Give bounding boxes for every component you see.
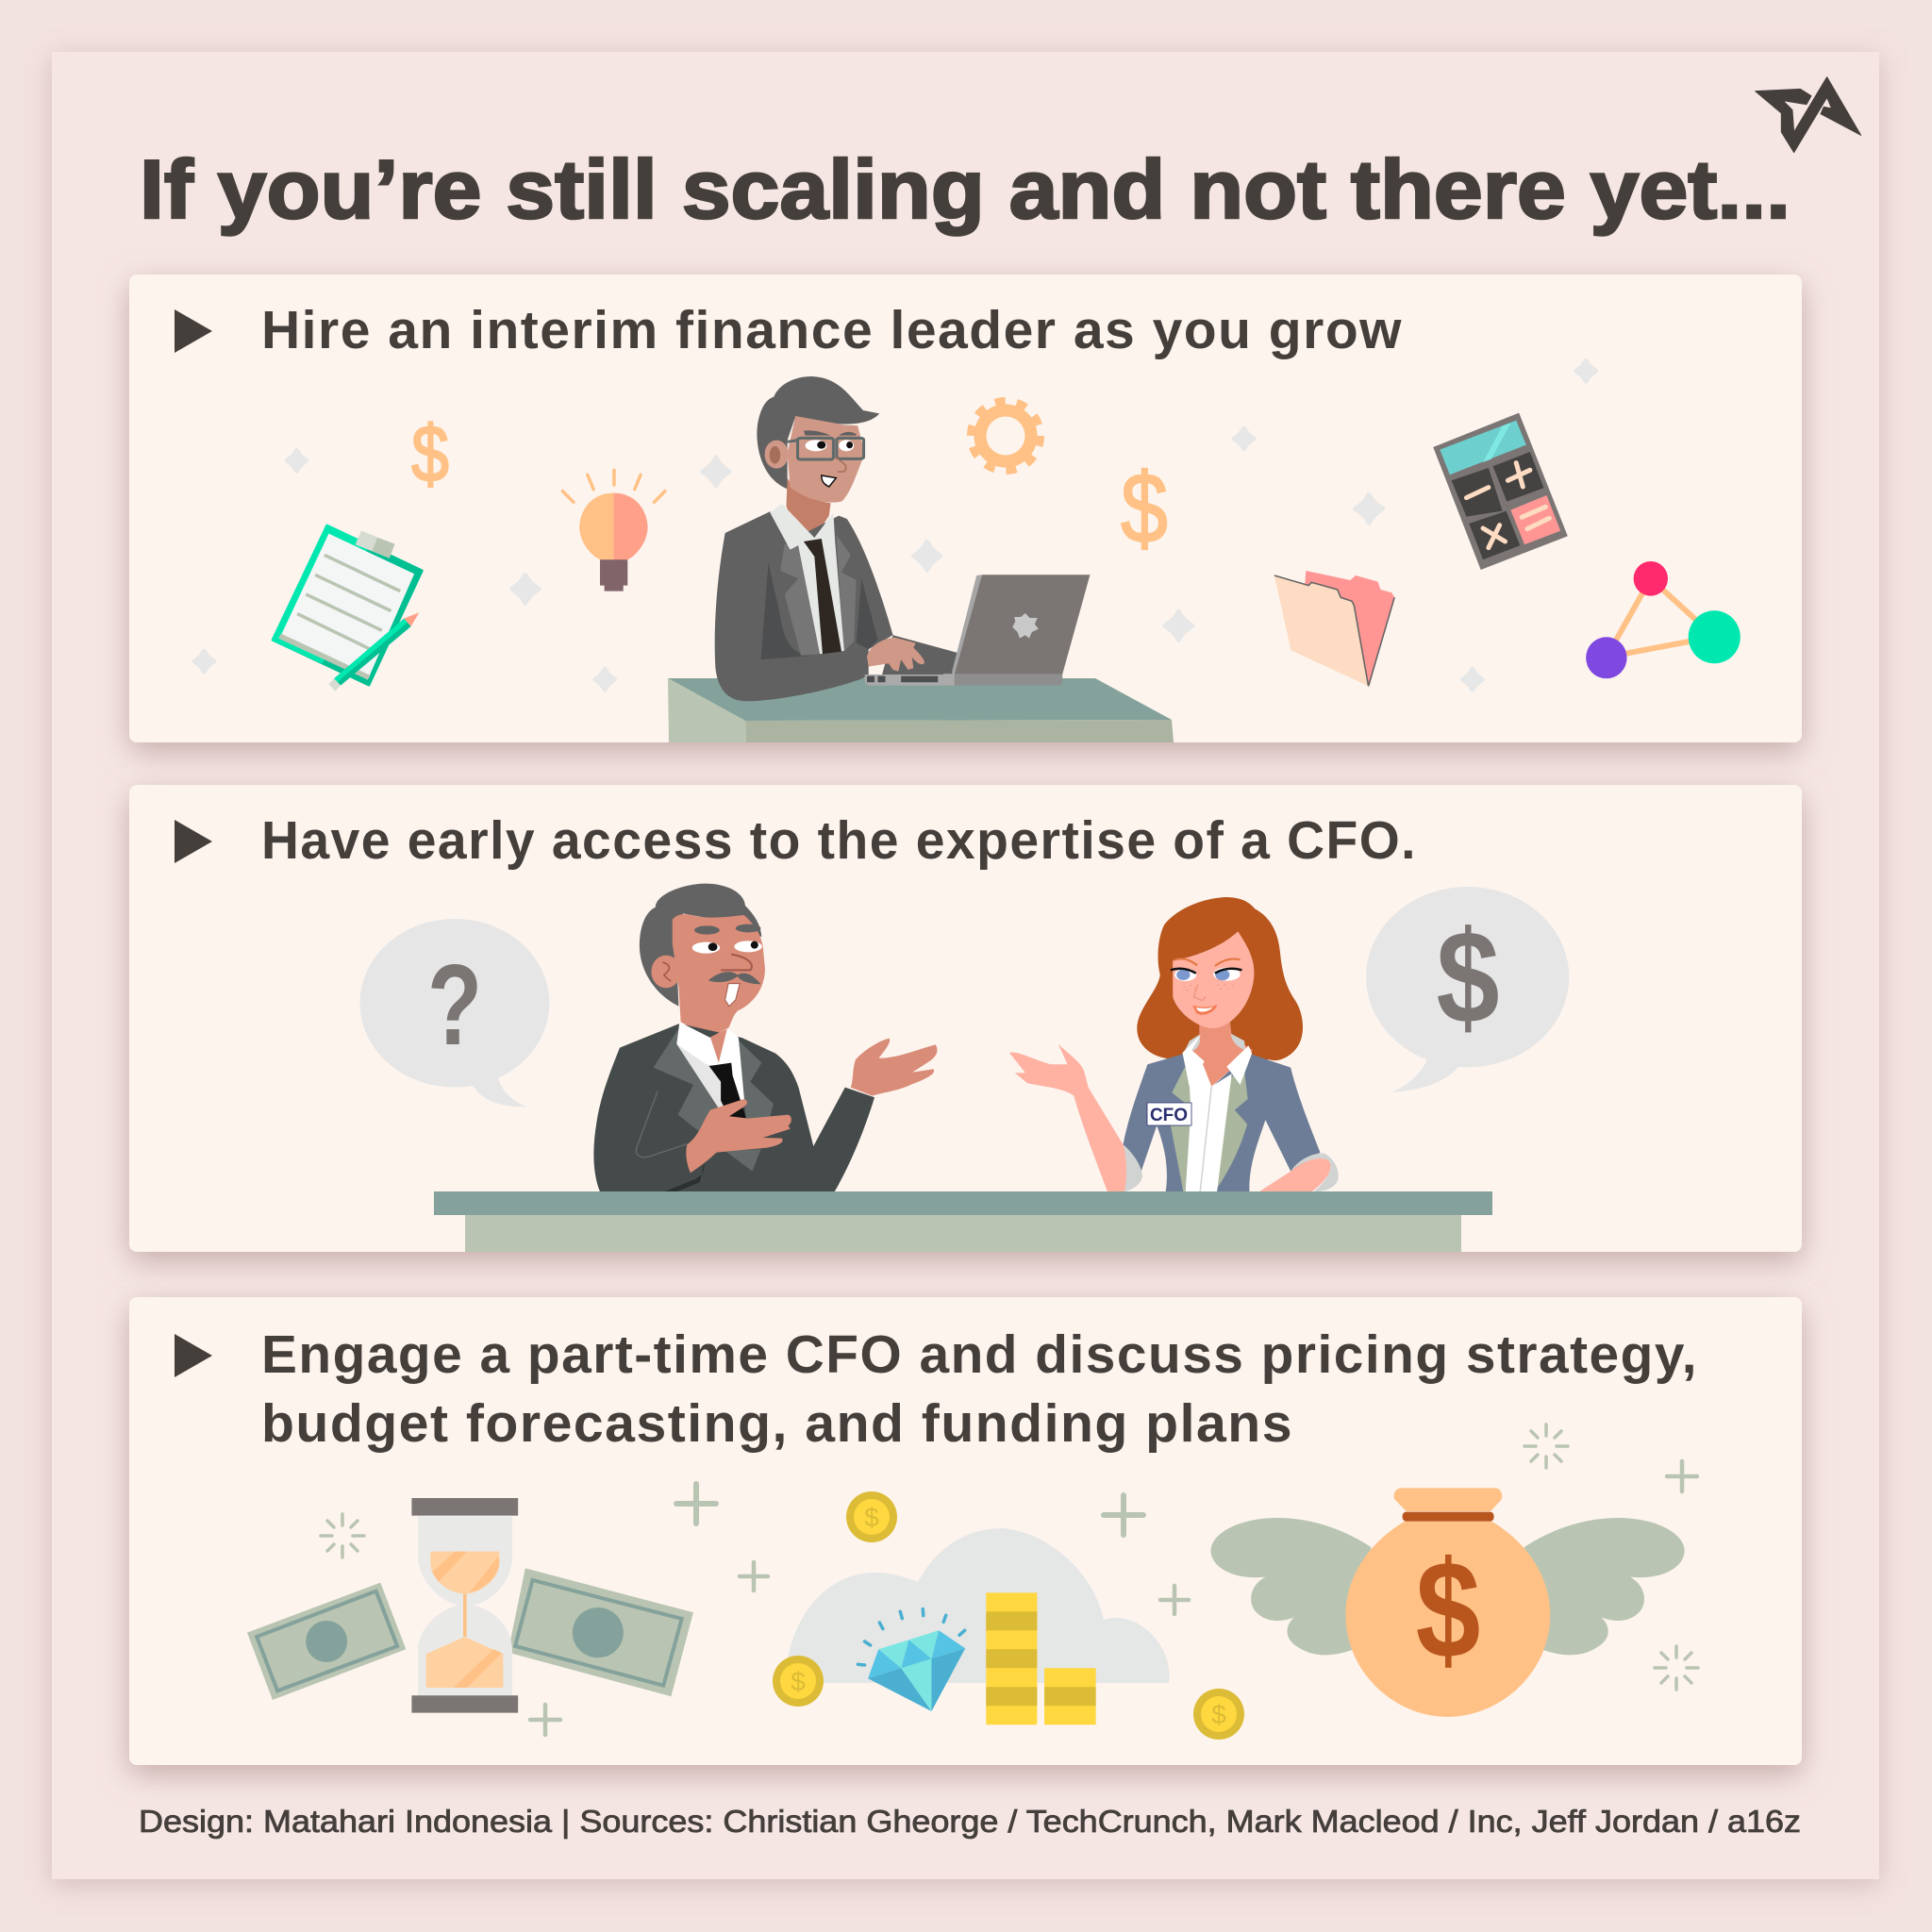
character: female CFO xyxy=(1009,897,1339,1191)
icon: light bulb xyxy=(562,470,665,591)
speech bubble: question xyxy=(360,919,549,1107)
character: older man xyxy=(593,884,938,1191)
desk xyxy=(668,678,1174,742)
sparkle stars xyxy=(1165,361,1596,690)
icon: laptop xyxy=(943,575,1090,686)
speech bubble: dollar xyxy=(1366,887,1569,1092)
panel: part-time CFO xyxy=(129,1297,1802,1765)
icon: dollar sign: $ xyxy=(411,408,449,498)
character: man with laptop xyxy=(715,376,962,701)
sparkle stars xyxy=(194,451,941,690)
heading: Engage a part-time CFO and discuss pricing strategy, xyxy=(261,1324,1698,1385)
icon: diamond xyxy=(858,1609,965,1711)
icon: flying money bag and coin stacks xyxy=(986,1488,1685,1724)
CFO name tag: CFO xyxy=(1150,1106,1188,1125)
panel: hire an interim finance leader xyxy=(129,275,1802,742)
icon: money and hourglass xyxy=(247,1498,693,1713)
right illustrations xyxy=(943,361,1740,690)
left illustrations xyxy=(194,451,941,691)
arrow bullet xyxy=(175,820,212,863)
icon: folder xyxy=(1274,571,1394,686)
panel: early access to CFO expertise xyxy=(129,785,1802,1252)
arrow bullet xyxy=(175,309,212,353)
wings xyxy=(1211,1518,1685,1655)
heading: Hire an interim finance leader as you grow xyxy=(261,300,1403,360)
logo xyxy=(1756,77,1861,153)
bag dollar sign: $ xyxy=(1416,1532,1480,1687)
heading: Have early access to the expertise of a CFO. xyxy=(261,810,1417,871)
bag xyxy=(1345,1488,1550,1717)
coin stacks xyxy=(986,1592,1096,1724)
icon: plus marks xyxy=(530,1461,1697,1735)
icon: coins: $ xyxy=(1211,1700,1226,1729)
icon: sparkle bursts xyxy=(321,1424,1698,1690)
footer credits: Design: Matahari Indonesia | Sources: Christian Gheorge / TechCrunch, Mark Macleod / Inc, Jeff Jordan / a16z xyxy=(139,1804,1801,1839)
icon: gear xyxy=(971,401,1041,471)
icon: calculator xyxy=(1433,413,1568,570)
title: If you’re still scaling and not there yet... xyxy=(140,142,1790,236)
speech bubble: dollar: $ xyxy=(1437,903,1499,1051)
icon: dollar sign: $ xyxy=(1121,453,1168,564)
icon: clipboard and pencil xyxy=(273,525,422,691)
arrow bullet xyxy=(175,1334,212,1377)
icon: cloud xyxy=(785,1528,1170,1683)
icon: coins: $ xyxy=(864,1503,879,1532)
desk xyxy=(434,1191,1492,1252)
heading: budget forecasting, and funding plans xyxy=(261,1393,1293,1454)
icon: coins: $ xyxy=(791,1667,806,1696)
speech bubble: question: ? xyxy=(427,941,482,1070)
icon: coins xyxy=(773,1491,1244,1740)
icon: network nodes xyxy=(1586,561,1740,678)
